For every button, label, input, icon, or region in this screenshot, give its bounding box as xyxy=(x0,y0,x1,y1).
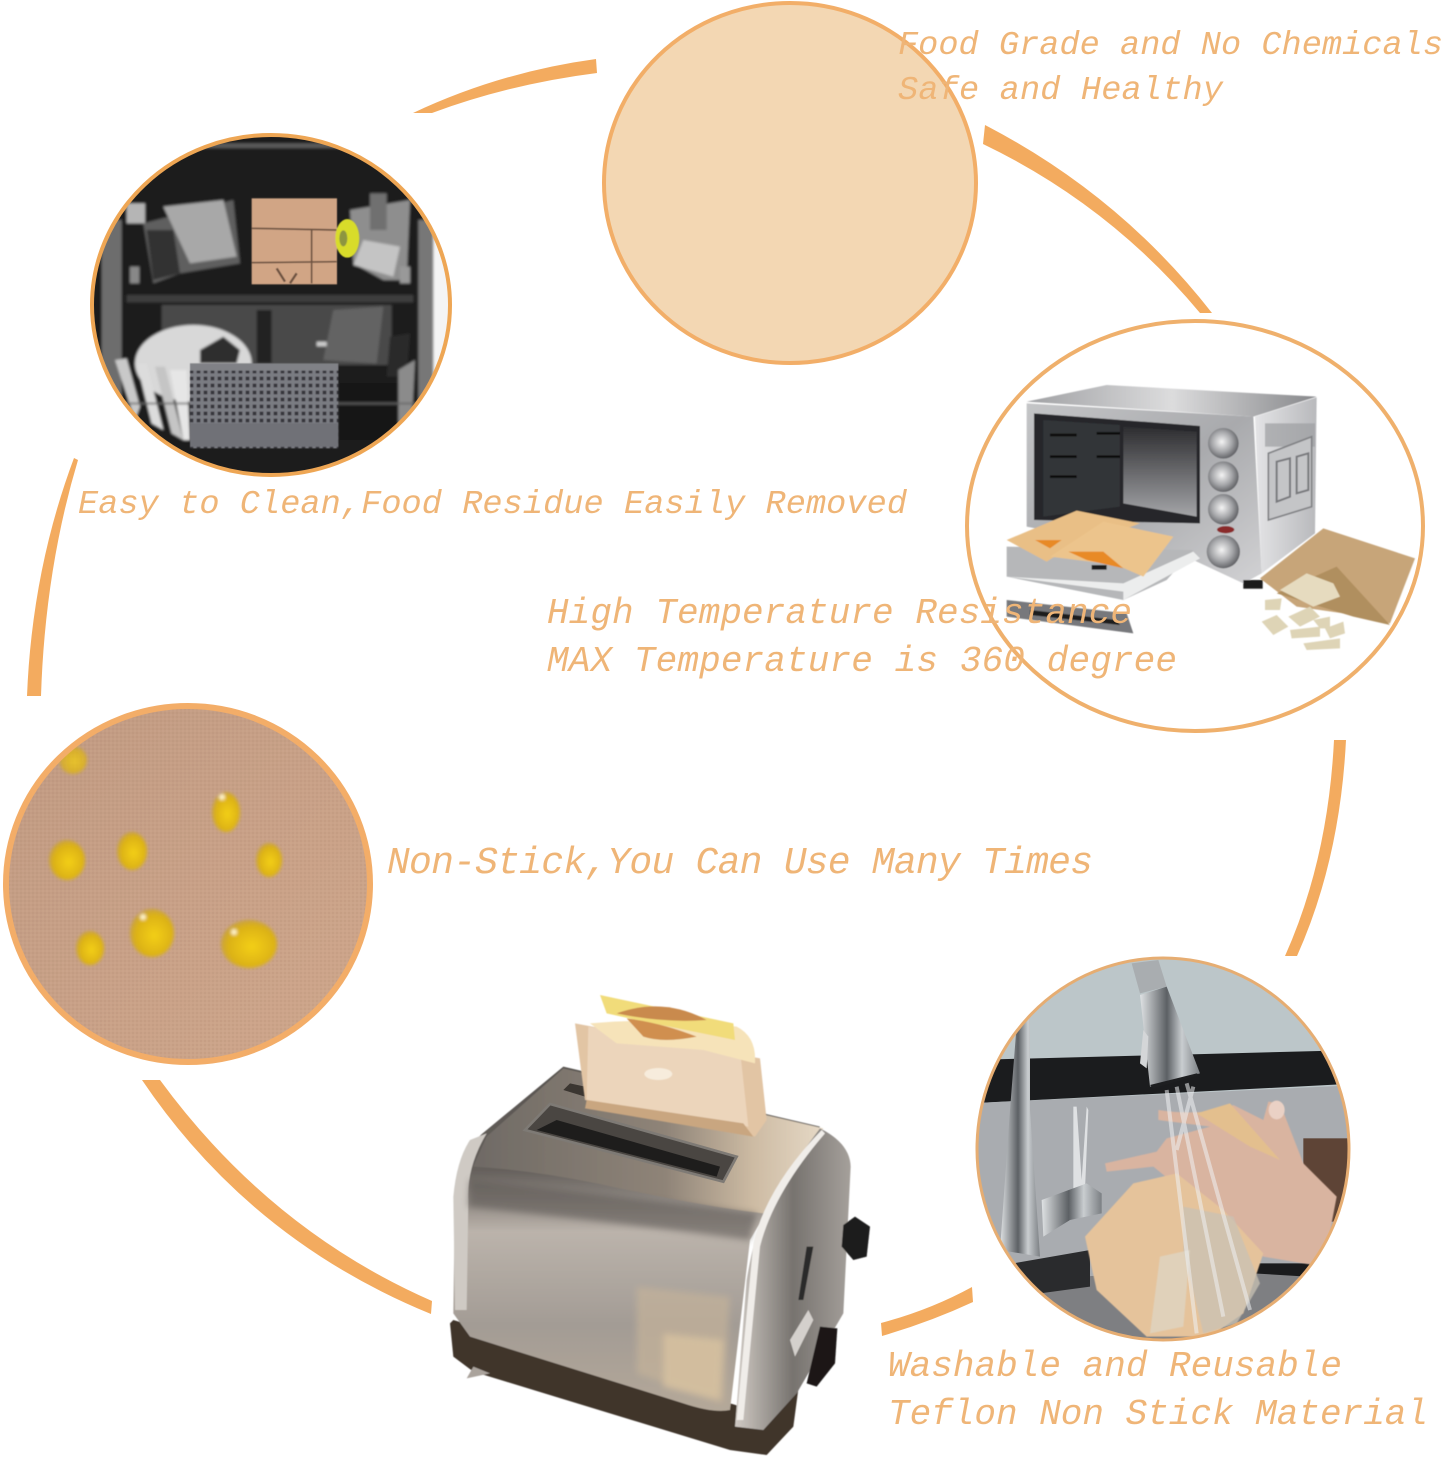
oven with bags illustration xyxy=(1007,385,1415,650)
panel: washing photo circle xyxy=(970,950,1360,1350)
text: food grade: Safe and Healthy xyxy=(898,72,1224,110)
text: easy to clean: Easy to Clean,Food Residue Easily Removed xyxy=(78,486,908,524)
panel: non-stick oil drops circle xyxy=(0,700,376,1070)
panel: dishwasher photo circle xyxy=(90,130,460,480)
panel: food grade round mat xyxy=(604,3,976,363)
text: washable: Washable and Reusable xyxy=(888,1346,1342,1387)
panel: oven photo circle xyxy=(967,321,1423,731)
oil droplets xyxy=(49,746,282,968)
panel: toaster photo xyxy=(450,995,870,1455)
text: non-stick: Non-Stick,You Can Use Many Times xyxy=(387,842,1093,885)
text: high temperature: MAX Temperature is 360 degree xyxy=(547,641,1177,682)
text: high temperature: High Temperature Resistance xyxy=(547,593,1132,634)
text: washable: Teflon Non Stick Material xyxy=(888,1394,1428,1435)
text: high temperature xyxy=(547,593,1177,682)
text: food grade xyxy=(898,27,1443,110)
toaster bag and sandwich xyxy=(575,1023,767,1137)
text: food grade: Food Grade and No Chemicals xyxy=(898,27,1443,65)
text: washable xyxy=(888,1346,1428,1435)
ring of arc segments xyxy=(27,59,1346,1336)
